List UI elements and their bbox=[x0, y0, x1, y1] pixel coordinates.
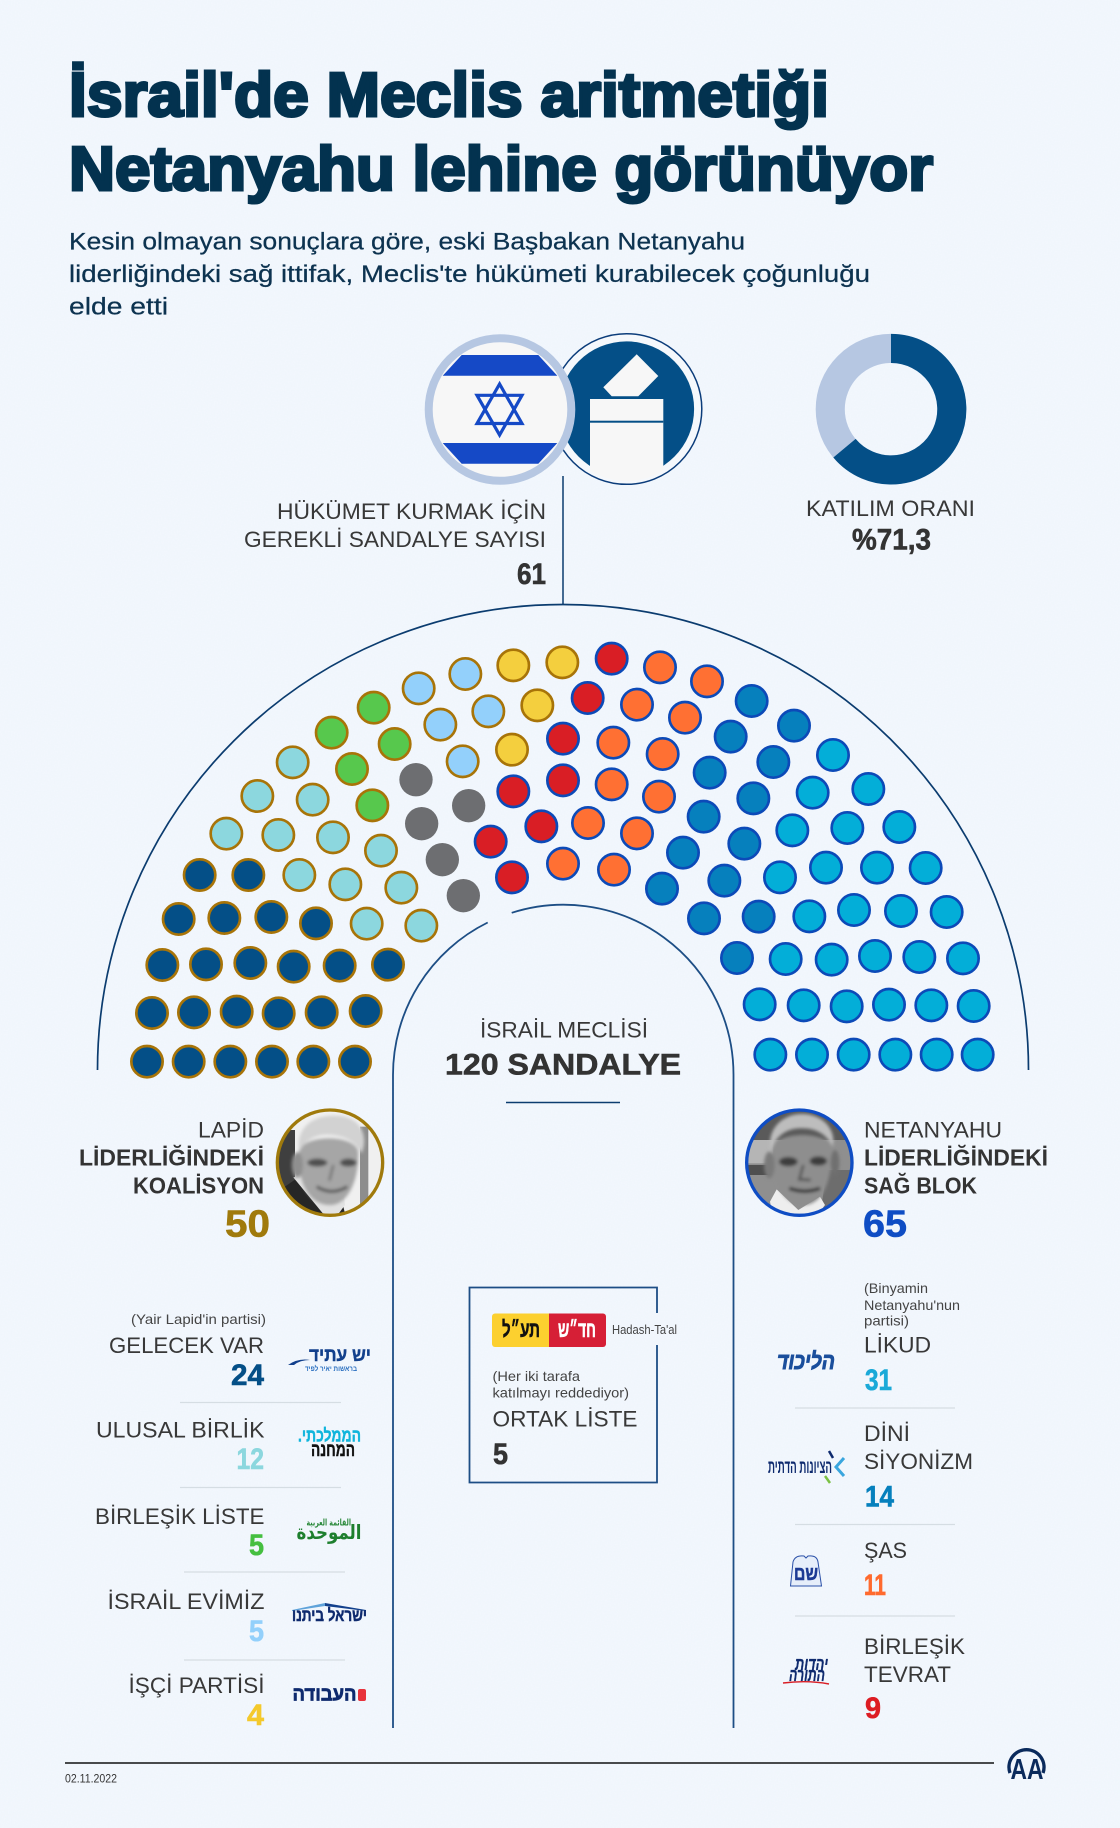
majority label: GEREKLİ SANDALYE SAYISI bbox=[244, 527, 546, 552]
panel: Netanyahu bloc heading: 65 bbox=[863, 1204, 907, 1246]
party: Likud: 31 bbox=[865, 1364, 892, 1397]
panel: Ortak Liste box: katılmayı reddediyor) bbox=[492, 1384, 629, 1400]
logo: Yesh Atid bbox=[288, 1345, 371, 1373]
logo: National Unity bbox=[298, 1426, 361, 1461]
parliament seats: Lapid coalition bbox=[131, 647, 578, 1077]
party: Gelecek Var: (Yair Lapid'in partisi) bbox=[131, 1311, 266, 1327]
logo: United Torah Judaism: יהדות bbox=[794, 1654, 828, 1674]
logo: Hadash-Ta'al: תע״ל bbox=[502, 1317, 540, 1342]
party: Likud: Netanyahu'nun bbox=[864, 1297, 960, 1313]
subtitle text: Kesin olmayan sonuçlara göre, eski Başbakan Netanyahu bbox=[69, 228, 745, 256]
party: Gelecek Var: 24 bbox=[231, 1359, 264, 1392]
parliament total label: İSRAİL MECLİSİ bbox=[480, 1018, 648, 1042]
party: İsrail Evimiz: İSRAİL EVİMİZ bbox=[108, 1589, 264, 1614]
majority label: 61 bbox=[517, 558, 546, 591]
party: Likud: (Binyamin bbox=[864, 1280, 928, 1296]
party: Gelecek Var bbox=[109, 1311, 266, 1392]
logo: Shas: שם bbox=[794, 1563, 818, 1585]
party: Ulusal Birlik: 12 bbox=[236, 1443, 264, 1476]
party: Dini Siyonizm: 14 bbox=[865, 1480, 894, 1514]
logo: Religious Zionism: הציונות הדתית bbox=[768, 1457, 832, 1478]
seats: Birleşik Tevrat bbox=[475, 643, 627, 893]
seats: Gelecek Var 24 bbox=[131, 859, 404, 1077]
logo: Hadash-Ta'al bbox=[492, 1314, 677, 1347]
parliament seats: Ortak Liste 5 bbox=[399, 763, 485, 912]
logo: Yisrael Beiteinu: ישראל ביתנו bbox=[292, 1606, 367, 1625]
party: İsrail Evimiz bbox=[108, 1589, 264, 1648]
party: Gelecek Var: GELECEK VAR bbox=[109, 1333, 264, 1358]
party: Likud: partisi) bbox=[864, 1312, 909, 1328]
seats: Dini Siyonizm 14 bbox=[646, 685, 810, 974]
panel: Netanyahu bloc heading: LİDERLİĞİNDEKİ bbox=[864, 1144, 1048, 1170]
party: Birleşik Tevrat: BİRLEŞİK bbox=[864, 1634, 965, 1659]
turnout label: %71,3 bbox=[852, 524, 931, 556]
logo: Likud: הליכוד bbox=[777, 1348, 835, 1374]
parliament total label bbox=[445, 1018, 681, 1102]
party: Dini Siyonizm: DİNİ bbox=[864, 1421, 910, 1446]
panel: Netanyahu bloc heading: SAĞ BLOK bbox=[864, 1172, 977, 1198]
seats: İsrail Evimiz 5 bbox=[403, 658, 504, 777]
logo: Religious Zionism bbox=[768, 1451, 844, 1483]
party: Birleşik Tevrat: TEVRAT bbox=[864, 1662, 951, 1687]
party: Dini Siyonizm bbox=[864, 1421, 973, 1514]
logo: Shas bbox=[790, 1556, 822, 1586]
panel: Lapid coalition heading bbox=[79, 1118, 270, 1246]
turnout label bbox=[806, 496, 975, 556]
parliament seats: Netanyahu bloc bbox=[475, 643, 993, 1070]
parliament total label: 120 SANDALYE bbox=[445, 1048, 681, 1082]
logo: National Unity: המחנה bbox=[311, 1440, 355, 1461]
seats: Likud 31 bbox=[744, 739, 993, 1070]
icon: AA logo bbox=[1009, 1750, 1044, 1786]
party: Şas: ŞAS bbox=[864, 1538, 907, 1563]
logo: Hadash-Ta'al: Hadash-Ta'al bbox=[612, 1323, 677, 1337]
panel: Ortak Liste box: ORTAK LİSTE bbox=[492, 1406, 638, 1432]
logo: United Arab List: الموحدة bbox=[296, 1520, 362, 1544]
logo: United Torah Judaism: התורה bbox=[789, 1665, 825, 1685]
portrait: Yair Lapid bbox=[273, 1107, 387, 1220]
majority pointer line bbox=[562, 476, 564, 604]
turnout donut chart bbox=[830, 348, 952, 470]
party: Dini Siyonizm: SİYONİZM bbox=[864, 1449, 973, 1474]
subtitle text: elde etti bbox=[69, 294, 168, 320]
panel: Ortak Liste box bbox=[470, 1288, 677, 1482]
turnout label: KATILIM ORANI bbox=[806, 496, 975, 521]
title bbox=[69, 61, 933, 204]
party: İşçi Partisi: 4 bbox=[247, 1699, 264, 1732]
seats: Ulusal Birlik 12 bbox=[211, 747, 437, 941]
party: Likud: LİKUD bbox=[864, 1332, 931, 1358]
icon: ballot box bbox=[551, 334, 702, 489]
logo: National Unity: הממלכתי.‏ bbox=[298, 1426, 361, 1446]
majority label: HÜKÜMET KURMAK İÇİN bbox=[277, 499, 546, 524]
logo: Yesh Atid: יש עתיד bbox=[309, 1345, 371, 1366]
logo: United Torah Judaism bbox=[783, 1654, 829, 1685]
party: İşçi Partisi bbox=[128, 1673, 264, 1732]
outer parliament arc bbox=[98, 605, 1028, 1070]
party: Ulusal Birlik bbox=[96, 1418, 265, 1476]
logo: Labor: העבודה bbox=[292, 1684, 356, 1706]
party: Birleşik Tevrat bbox=[864, 1634, 965, 1725]
majority label bbox=[244, 499, 546, 591]
party: Birleşik Liste: 5 bbox=[249, 1529, 264, 1562]
party: Birleşik Liste bbox=[95, 1504, 264, 1562]
seats: İşçi Partisi 4 bbox=[496, 647, 578, 765]
party: Birleşik Tevrat: 9 bbox=[865, 1692, 881, 1725]
title: İsrail'de Meclis aritmetiği bbox=[69, 61, 829, 130]
panel: Ortak Liste box: (Her iki tarafa bbox=[492, 1368, 580, 1384]
seats: Birleşik Liste 5 bbox=[316, 692, 410, 821]
panel: Netanyahu bloc party list bbox=[768, 1280, 973, 1725]
party: İsrail Evimiz: 5 bbox=[249, 1615, 264, 1648]
panel: Lapid coalition heading: LİDERLİĞİNDEKİ bbox=[79, 1144, 264, 1170]
subtitle text: liderliğindeki sağ ittifak, Meclis'te hükümeti kurabilecek çoğunluğu bbox=[69, 261, 870, 288]
party: İşçi Partisi: İŞÇİ PARTİSİ bbox=[128, 1673, 264, 1698]
panel: Ortak Liste box: 5 bbox=[493, 1438, 508, 1471]
panel: Netanyahu bloc heading bbox=[863, 1118, 1048, 1246]
icon: Israeli flag bbox=[429, 338, 571, 481]
party: Ulusal Birlik: ULUSAL BİRLİK bbox=[96, 1418, 265, 1442]
subtitle text bbox=[69, 228, 870, 320]
date: 02.11.2022 bbox=[65, 1774, 117, 1786]
party: Şas bbox=[864, 1538, 907, 1602]
icon: AA logo: AA bbox=[1010, 1754, 1044, 1786]
panel: Netanyahu bloc heading: NETANYAHU bbox=[864, 1118, 1002, 1142]
portrait: Benjamin Netanyahu bbox=[743, 1107, 857, 1220]
panel: Lapid coalition heading: 50 bbox=[225, 1204, 270, 1246]
seats: Şas bbox=[547, 652, 723, 885]
footer rule bbox=[65, 1762, 994, 1764]
party: Şas: 11 bbox=[864, 1569, 886, 1602]
inner arch with column lines bbox=[393, 905, 734, 1728]
logo: Hadash-Ta'al: חד״ש bbox=[558, 1317, 596, 1342]
logo: United Arab List: القائمة العربية bbox=[306, 1518, 351, 1528]
party: Likud bbox=[864, 1280, 960, 1397]
panel: Lapid coalition heading: LAPİD bbox=[198, 1118, 264, 1142]
panel: Lapid coalition party list bbox=[95, 1311, 371, 1732]
party: Birleşik Liste: BİRLEŞİK LİSTE bbox=[95, 1504, 264, 1529]
panel: Lapid coalition heading: KOALİSYON bbox=[133, 1172, 264, 1198]
title: Netanyahu lehine görünüyor bbox=[69, 135, 933, 204]
logo: Yesh Atid: בראשות יאיר לפיד bbox=[305, 1364, 357, 1373]
